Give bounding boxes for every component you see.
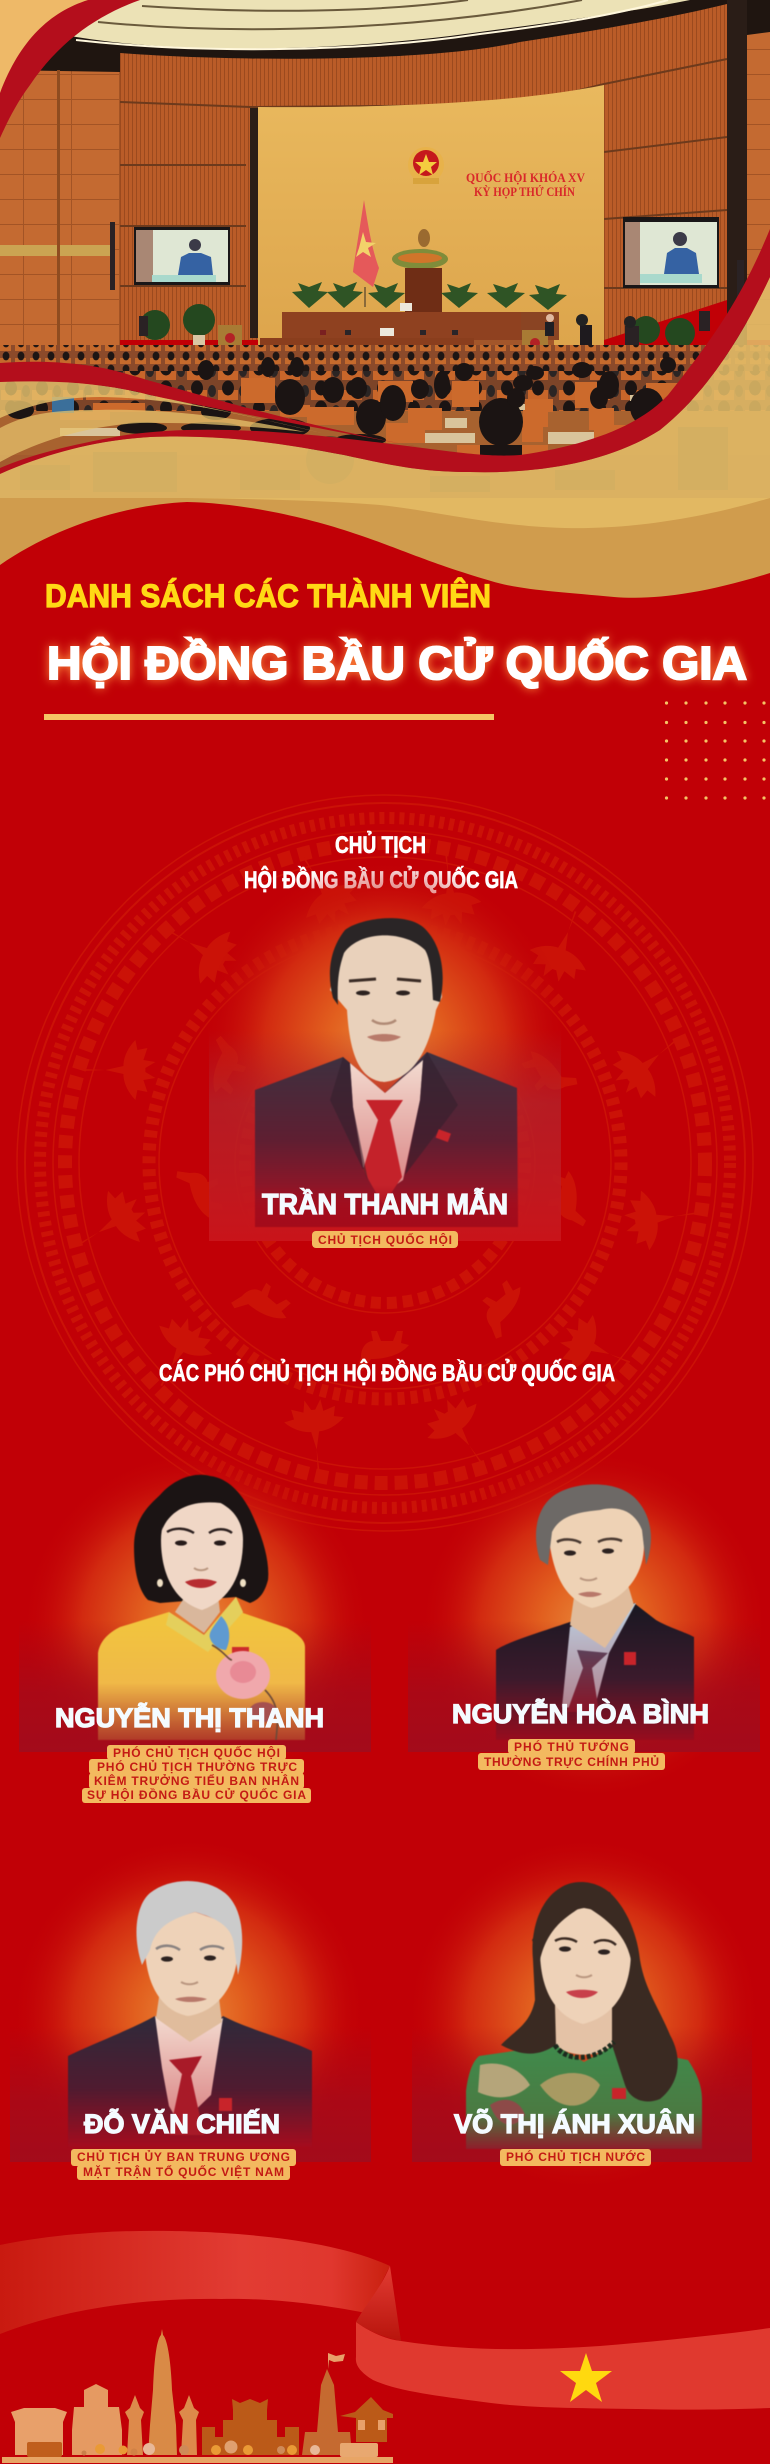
bronze drum medallion watermark: [17, 795, 753, 1531]
left small tower: [125, 2395, 144, 2455]
person: Nguyễn Thị Thanh: [19, 1450, 371, 1803]
role pills: PHÓ CHỦ TỊCH QUỐC HỘI: [113, 1745, 280, 1760]
left brick wall: [0, 70, 120, 370]
side plants and speakers: [110, 222, 744, 365]
role pills: CHỦ TỊCH ỦY BAN TRUNG ƯƠNG: [77, 2149, 290, 2164]
portrait: [68, 1881, 312, 2147]
section heading: chairman: HỘI ĐỒNG BẦU CỬ QUỐC GIA: [244, 865, 518, 894]
upper ribbon: [0, 2231, 390, 2334]
tan wave above title: [0, 498, 770, 598]
role pills: PHÓ CHỦ TỊCH THƯỜNG TRỰC: [97, 1759, 297, 1774]
role pill: PHÓ CHỦ TỊCH NƯỚC: [506, 2149, 645, 2164]
plants behind the presidium: [292, 282, 567, 310]
wall text: QUỐC HỘI KHÓA XV: [466, 170, 586, 185]
name: NGUYỄN HÒA BÌNH: [452, 1698, 709, 1729]
heading underline: [44, 714, 494, 720]
flag tower: [302, 2369, 352, 2455]
central pagoda: [148, 2329, 177, 2455]
dark temple: [202, 2399, 299, 2455]
heading: list of members: DANH SÁCH CÁC THÀNH VIÊN: [45, 578, 491, 614]
translucent gold foreground wave: [0, 277, 770, 498]
role pills: PHÓ THỦ TƯỚNG: [514, 1739, 629, 1754]
backing panel: [19, 1620, 371, 1752]
name: ĐỖ VĂN CHIẾN: [84, 2108, 280, 2139]
far right wall: [727, 0, 747, 350]
portrait: [496, 1484, 694, 1740]
portrait: [255, 918, 518, 1227]
wall text: [466, 170, 586, 199]
portrait: [98, 1475, 305, 1740]
ground strip: [2, 2457, 393, 2463]
orange glow: [21, 1450, 371, 1800]
role pills: SỰ HỘI ĐỒNG BẦU CỬ QUỐC GIA: [87, 1787, 306, 1802]
translucent gold left waves: [0, 380, 322, 462]
backing panel: [10, 2026, 371, 2162]
orange glow: [11, 1836, 367, 2192]
stilt house: [340, 2397, 393, 2442]
decorative dots: [665, 701, 766, 800]
bust and flowers: [392, 229, 448, 312]
orange glow: [200, 858, 570, 1228]
ghost figures under the gold overlay: [20, 427, 728, 492]
temple tower: [72, 2384, 122, 2455]
backing panel: [412, 2026, 752, 2162]
backing panel: [209, 1030, 561, 1241]
heading: national election council: HỘI ĐỒNG BẦU CỬ QUỐC GIA: [47, 637, 747, 689]
role pills: [82, 1745, 311, 1803]
role pills: THƯỜNG TRỰC CHÍNH PHỦ: [484, 1754, 659, 1769]
name: VÕ THỊ ÁNH XUÂN: [454, 2108, 695, 2139]
orange glow: [406, 1836, 762, 2192]
name: TRẦN THANH MẪN: [262, 1187, 508, 1221]
role pills: [71, 2149, 296, 2180]
dark red taper band: [0, 362, 424, 448]
section heading: chairman: [244, 830, 518, 894]
Vietnamese flag: [353, 200, 379, 307]
role pills: KIÊM TRƯỞNG TIỂU BAN NHÂN: [94, 1773, 299, 1788]
ribbon fold: [356, 2266, 401, 2341]
section heading: vice chairs: CÁC PHÓ CHỦ TỊCH HỘI ĐỒNG BẦU CỬ QUỐC GIA: [159, 1358, 615, 1387]
right small tower: [179, 2395, 199, 2455]
tower flag: [328, 2353, 345, 2369]
house windows: [358, 2420, 385, 2430]
hero photo: National Assembly hall: [0, 0, 770, 498]
red sweeping band: [0, 229, 770, 474]
left screen: [134, 227, 230, 285]
trees: [82, 2440, 320, 2456]
city skyline: [2, 2329, 393, 2463]
person: Võ Thị Ánh Xuân: [406, 1836, 762, 2192]
vehicles: [27, 2442, 378, 2457]
lower ribbon: [356, 2322, 770, 2410]
role pill: CHỦ TỊCH QUỐC HỘI: [318, 1232, 452, 1247]
audience rows: [0, 345, 770, 498]
top-left corner swoosh: [0, 0, 140, 138]
light gold wave: [186, 498, 770, 528]
person: Đỗ Văn Chiến: [10, 1836, 371, 2192]
desks: [60, 395, 648, 444]
seat backs: [60, 378, 680, 455]
ceiling and dark upper hall: [0, 0, 770, 110]
orange glow: [419, 1450, 769, 1800]
person: Trần Thanh Mẫn: [200, 858, 570, 1248]
centre golden wall: [258, 85, 604, 345]
right screen: [623, 217, 719, 288]
role pills: MẶT TRẬN TỔ QUỐC VIỆT NAM: [83, 2164, 284, 2179]
assembly building: [11, 2408, 67, 2455]
flag ribbon: [0, 2231, 770, 2410]
wood wall panels: [120, 4, 727, 340]
backing panel: [408, 1620, 760, 1752]
portrait: [466, 1882, 702, 2149]
section heading: chairman: CHỦ TỊCH: [335, 830, 426, 859]
wall text: KỲ HỌP THỨ CHÍN: [474, 184, 576, 199]
national emblem: [408, 147, 444, 184]
heads: [6, 357, 676, 457]
gold star: [560, 2353, 612, 2402]
name: NGUYỄN THỊ THANH: [55, 1702, 324, 1733]
person: Nguyễn Hòa Bình: [408, 1450, 769, 1800]
role pills: [478, 1739, 665, 1770]
presidium desks: [218, 303, 559, 360]
